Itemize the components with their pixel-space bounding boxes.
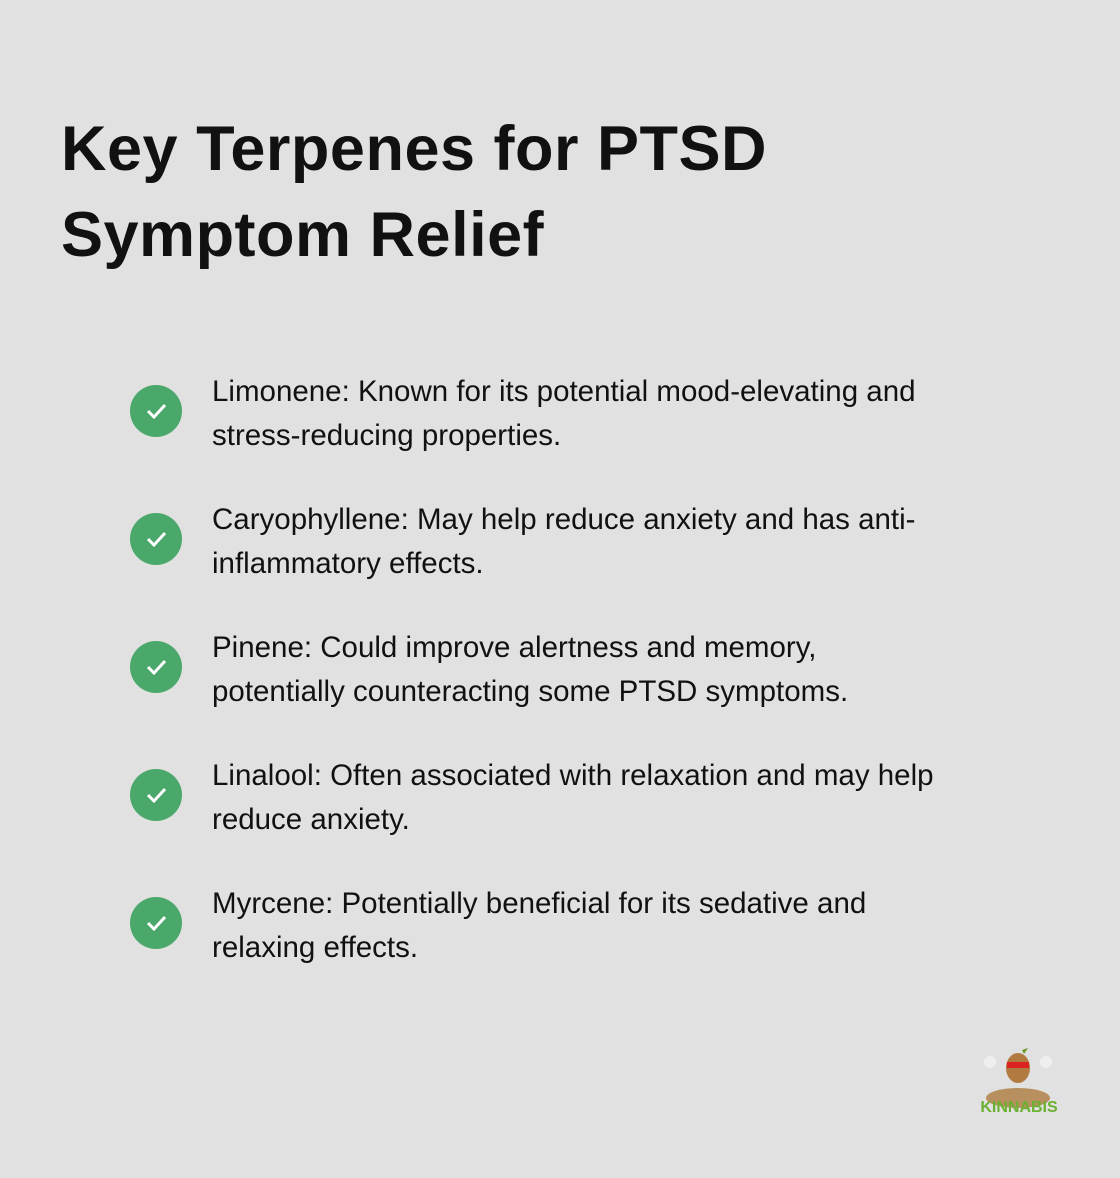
text: pinene	[212, 631, 848, 708]
text: limonene	[212, 375, 916, 452]
title: Key Terpenes for PTSD	[61, 114, 767, 184]
title: Symptom Relief	[61, 200, 544, 270]
icon: check	[130, 513, 182, 565]
text: linalool	[212, 759, 934, 836]
text: linalool: Linalool: Often associated with relaxation and may help	[212, 759, 934, 792]
item: limonene	[130, 375, 916, 452]
text: myrcene: relaxing effects.	[212, 931, 418, 964]
icon: check	[130, 641, 182, 693]
icon: check	[130, 385, 182, 437]
text: pinene: potentially counteracting some PTSD symptoms.	[212, 675, 848, 708]
text: limonene: Limonene: Known for its potential mood-elevating and	[212, 375, 916, 408]
text: caryophyllene: Caryophyllene: May help reduce anxiety and has anti-	[212, 503, 916, 536]
logo: KINNABIS	[980, 1099, 1058, 1116]
item: pinene	[130, 631, 848, 708]
text: linalool: reduce anxiety.	[212, 803, 410, 836]
text: limonene: stress-reducing properties.	[212, 419, 561, 452]
title	[61, 114, 767, 270]
text: caryophyllene: inflammatory effects.	[212, 547, 484, 580]
icon: check	[130, 897, 182, 949]
item: caryophyllene	[130, 503, 916, 580]
logo	[980, 1048, 1058, 1116]
icon: check	[130, 769, 182, 821]
text: pinene: Pinene: Could improve alertness and memory,	[212, 631, 816, 664]
text: myrcene	[212, 887, 866, 964]
item: myrcene	[130, 887, 866, 964]
text: myrcene: Myrcene: Potentially beneficial for its sedative and	[212, 887, 866, 920]
item: linalool	[130, 759, 934, 836]
text: caryophyllene	[212, 503, 916, 580]
